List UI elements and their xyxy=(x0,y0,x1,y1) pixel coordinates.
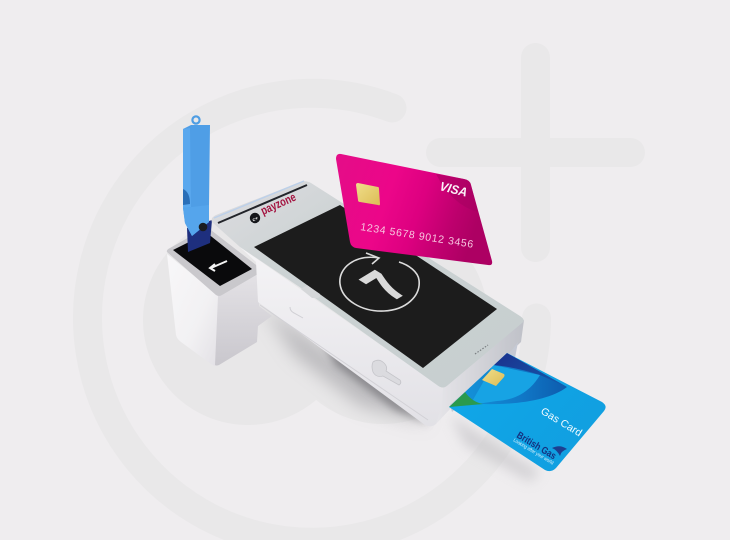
visa logo: VISA xyxy=(438,179,469,200)
payzone logo xyxy=(250,190,298,223)
background logo: inner lobes xyxy=(143,214,488,425)
payment terminal xyxy=(212,181,524,426)
printer slot xyxy=(218,185,307,223)
token dot xyxy=(199,223,207,231)
speaker dots xyxy=(475,345,488,354)
countdown ring xyxy=(340,253,419,311)
screen xyxy=(254,205,497,368)
token notch xyxy=(183,189,190,205)
cube left face xyxy=(167,254,219,366)
cube right face xyxy=(215,273,272,366)
side key outline xyxy=(290,307,303,318)
card number: 1234 5678 9012 3456 xyxy=(360,221,475,251)
terminal end face xyxy=(436,320,524,424)
gas card shadow xyxy=(450,415,540,482)
arrow on cube xyxy=(210,261,227,271)
token loop xyxy=(192,116,200,124)
token body xyxy=(183,125,210,236)
illustration: payment terminal with cards xyxy=(166,115,606,482)
payzone logo: c+ xyxy=(252,216,259,223)
gas card dark band xyxy=(493,353,567,387)
british gas wordmark: British Gas xyxy=(514,430,558,462)
gas card label: Gas Card xyxy=(538,405,584,439)
device shadow xyxy=(262,305,430,425)
visa chip xyxy=(356,183,380,205)
terminal side face xyxy=(240,247,450,426)
payzone logo: payzone xyxy=(259,190,298,218)
usb token xyxy=(183,116,212,252)
countdown number: 7 xyxy=(350,264,421,308)
british gas tagline: Looking after your world xyxy=(512,438,555,466)
token connector xyxy=(187,220,212,252)
key slot xyxy=(372,360,401,385)
background logo: plus sign xyxy=(426,43,645,262)
british gas logo mark xyxy=(552,446,567,456)
chip reader cube xyxy=(167,227,272,366)
terminal top face xyxy=(212,181,524,388)
background logo: large ring xyxy=(88,93,536,540)
visa card body xyxy=(336,154,492,265)
visa card xyxy=(336,154,492,265)
visa card dark corner xyxy=(436,174,478,212)
gas card green accent xyxy=(449,392,483,407)
side button xyxy=(301,285,320,298)
cube top frame xyxy=(167,227,260,296)
gas card xyxy=(449,353,606,471)
cube slot xyxy=(173,233,252,286)
gas card chip xyxy=(482,369,504,386)
gas card swoosh xyxy=(449,353,567,407)
gas card lighter panel xyxy=(470,365,540,405)
gas card body xyxy=(449,353,606,471)
